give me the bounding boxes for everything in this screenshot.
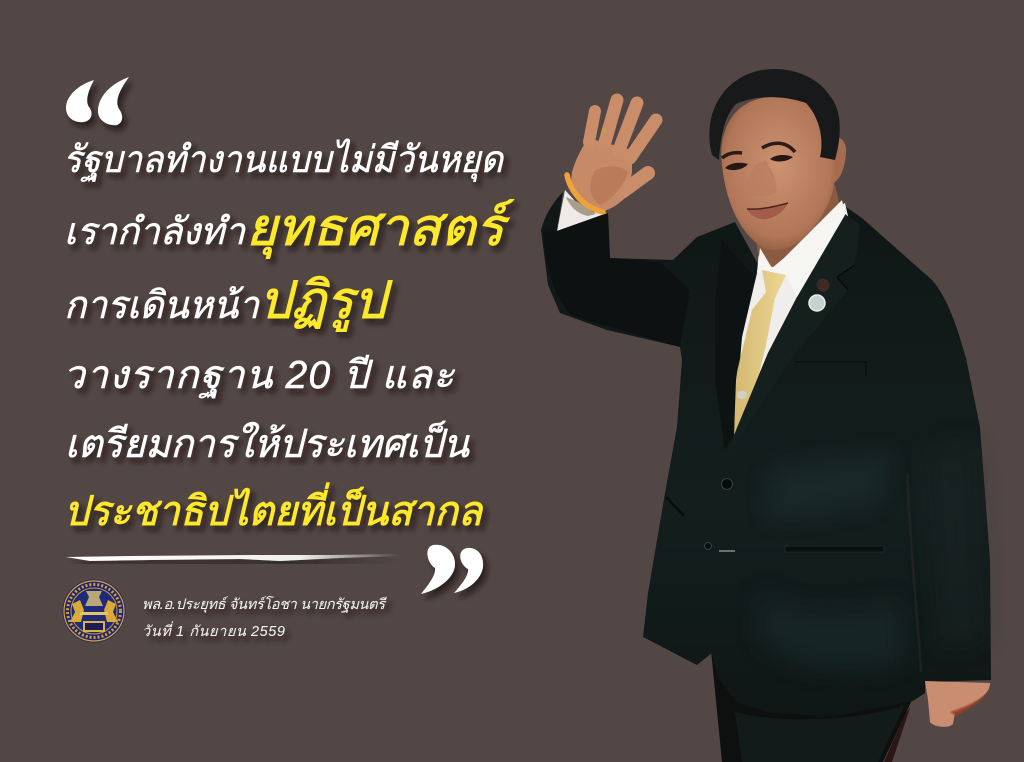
quote line 6: ประชาธิปไตยที่เป็นสากล — [64, 482, 484, 534]
ear — [828, 137, 846, 184]
photo: man in dark suit waving — [541, 69, 991, 762]
hair — [709, 69, 840, 160]
lapels — [715, 240, 755, 450]
collar — [757, 200, 845, 297]
brush divider — [66, 554, 400, 561]
quote line 5: เตรียมการให้ประเทศเป็น — [65, 420, 470, 466]
lapel pins — [816, 278, 830, 292]
quote line 3: การเดินหน้า — [64, 285, 261, 327]
shirt front — [734, 203, 848, 435]
shirt cuff and bracelet — [557, 190, 607, 231]
eyebrows — [722, 153, 742, 158]
gap between sleeve and body — [907, 473, 921, 672]
head — [709, 69, 846, 297]
sleeve shading — [543, 213, 690, 347]
suit jacket — [541, 192, 991, 716]
emblem seal — [62, 580, 126, 642]
eyes — [725, 163, 748, 170]
lowered hand — [925, 681, 990, 727]
quote line 2 — [64, 199, 514, 259]
quote line 3 — [64, 272, 393, 332]
trousers — [711, 650, 912, 762]
attribution name: พล.อ.ประยุทธ์ จันทร์โอชา นายกรัฐมนตรี — [142, 595, 387, 613]
face shape — [721, 97, 835, 250]
smile — [747, 203, 788, 219]
neck — [752, 185, 842, 270]
suit highlights — [770, 450, 890, 520]
nose — [743, 160, 776, 196]
tie clip — [737, 391, 747, 399]
opening quotation mark — [66, 77, 129, 125]
quote line 1: รัฐบาลทำงานแบบไม่มีวันหยุด — [63, 138, 505, 182]
quote line 2: เรากำลังทำ — [64, 211, 246, 252]
quote line 2: ยุทธศาสตร์ — [246, 199, 514, 259]
attribution date: วันที่ 1 กันยายน 2559 — [142, 621, 285, 640]
raised hand — [567, 100, 656, 212]
quote line 4: วางรากฐาน 20 ปี และ — [63, 354, 455, 399]
closing quotation mark — [421, 545, 483, 594]
jacket details — [722, 478, 732, 490]
necktie — [734, 270, 786, 435]
quote line 3: ปฏิรูป — [259, 272, 393, 332]
